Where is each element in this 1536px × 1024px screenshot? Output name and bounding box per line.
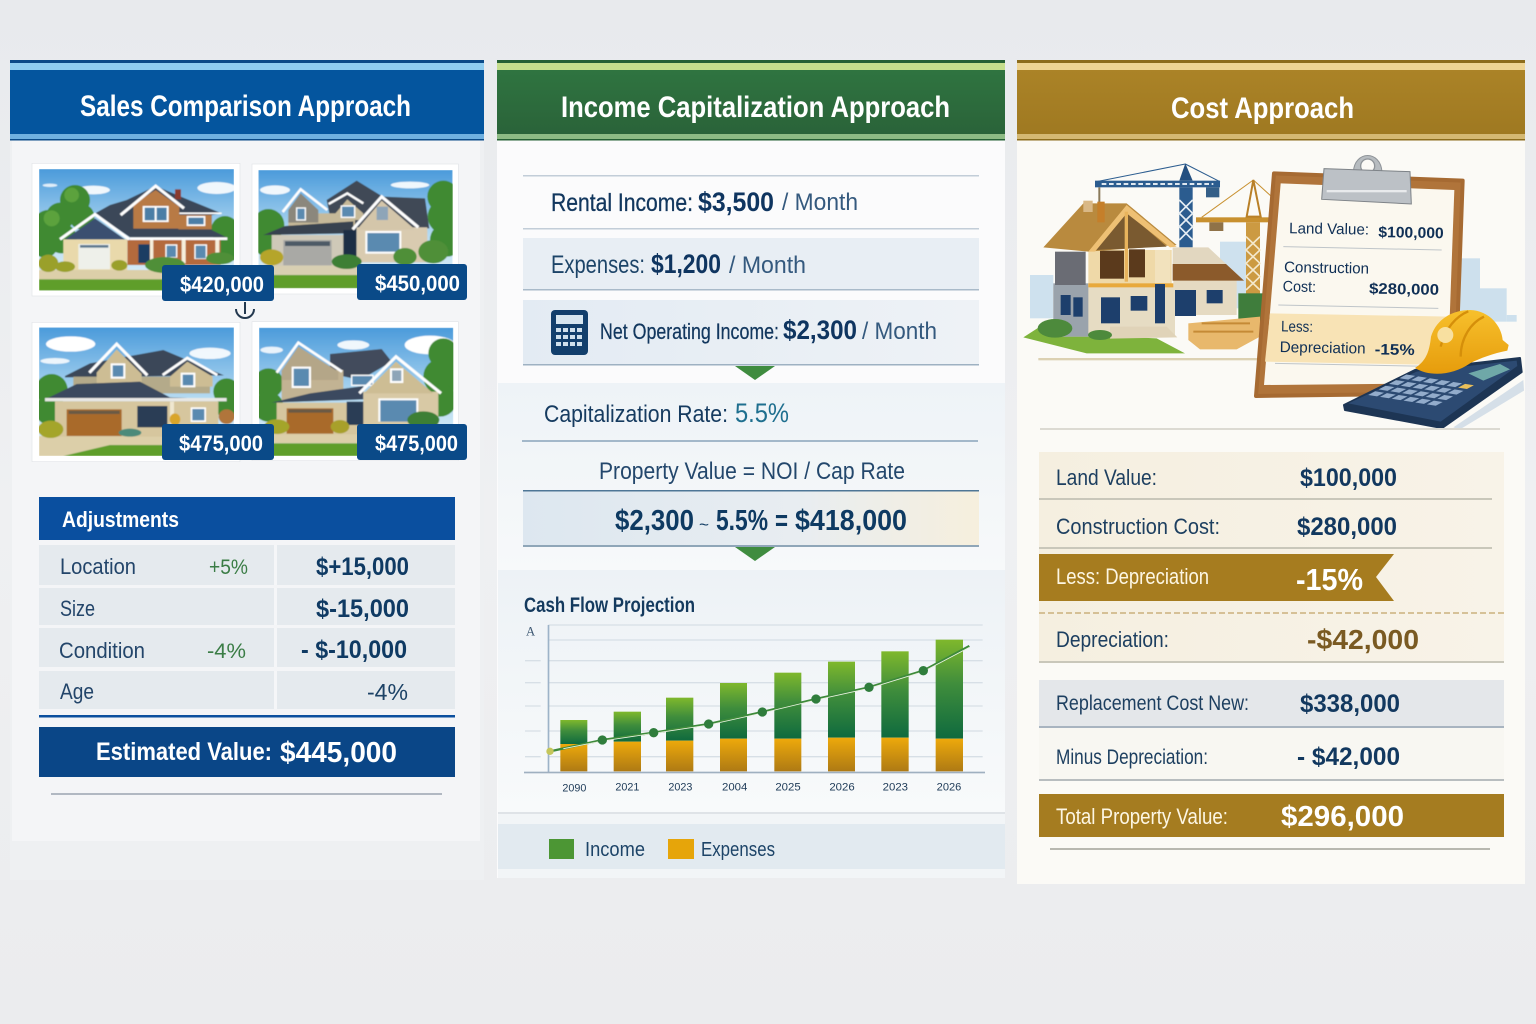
icon: calculator bbox=[551, 310, 588, 355]
row: depreciation: -$42,000 bbox=[1307, 624, 1419, 655]
heading: cost approach: Cost Approach bbox=[1171, 92, 1354, 125]
row: condition: -4% bbox=[207, 640, 246, 663]
row: rental income: Rental Income: bbox=[551, 189, 693, 217]
row: rental income: $3,500 bbox=[698, 187, 774, 217]
row: land value bbox=[1039, 464, 1492, 500]
icon: blue crane bbox=[1095, 163, 1220, 247]
year labels: 2004 bbox=[722, 782, 747, 794]
chart: cash flow projection bars bbox=[524, 624, 985, 794]
total property value bbox=[1039, 794, 1504, 837]
row: minus depreciation: Minus Depreciation: bbox=[1056, 746, 1208, 769]
row: size: $-15,000 bbox=[316, 595, 409, 623]
arrow: down to chart bbox=[735, 547, 775, 561]
estimated value result: $445,000 bbox=[280, 737, 397, 769]
row: land value: $100,000 bbox=[1300, 464, 1397, 492]
row: minus depreciation: - $42,000 bbox=[1297, 743, 1400, 771]
estimated value result bbox=[39, 727, 455, 777]
row: depreciation bbox=[1039, 624, 1504, 663]
row: location: $+15,000 bbox=[316, 553, 409, 581]
adjustments header bbox=[39, 497, 455, 540]
chart title: Cash Flow Projection bbox=[524, 594, 695, 617]
price tag: 420000: $420,000 bbox=[180, 272, 264, 297]
price tag: 475000 left bbox=[162, 424, 274, 460]
chart section band bbox=[498, 570, 1005, 813]
row: expenses: Expenses: bbox=[551, 251, 645, 279]
trend line bbox=[546, 646, 969, 755]
icon: hard hat bbox=[1415, 310, 1509, 374]
clipboard text: Depreciation bbox=[1280, 339, 1366, 358]
year labels: 2021 bbox=[615, 782, 639, 794]
heading: sales comparison approach bbox=[10, 60, 484, 140]
row: location: +5% bbox=[209, 556, 248, 579]
row: net operating income: / Month bbox=[862, 318, 937, 345]
photo: house one bbox=[32, 163, 243, 296]
panel: cost approach bbox=[1017, 60, 1525, 884]
row: land value: Land Value: bbox=[1056, 465, 1157, 490]
arrow: down to cap rate bbox=[735, 366, 775, 380]
icon: calculator bbox=[1344, 358, 1524, 429]
price tag: 450000 bbox=[357, 264, 467, 300]
row: expenses bbox=[523, 238, 979, 290]
row: replacement cost new: $338,000 bbox=[1300, 690, 1400, 718]
estimated value result: Estimated Value: bbox=[96, 738, 272, 766]
heading: income capitalization approach: Income Capitalization Approach bbox=[561, 91, 950, 124]
row: rental income bbox=[523, 175, 979, 230]
clipboard text: Less: bbox=[1281, 318, 1313, 336]
clipboard text: Cost: bbox=[1283, 278, 1316, 296]
capitalization rate: Capitalization Rate: bbox=[544, 401, 728, 428]
ribbon: less depreciation: Less: Depreciation bbox=[1056, 564, 1209, 589]
row: condition bbox=[39, 628, 455, 667]
year labels bbox=[562, 782, 961, 794]
cost table bbox=[1039, 452, 1504, 850]
adjustments header: Adjustments bbox=[62, 507, 179, 532]
icon: yellow crane bbox=[1196, 180, 1272, 323]
row: rental income: / Month bbox=[782, 189, 858, 216]
row: size: Size bbox=[60, 596, 95, 621]
price tag: 420000 bbox=[162, 265, 274, 301]
formula result: = bbox=[775, 505, 788, 537]
photo: house two bbox=[252, 164, 463, 294]
row: size bbox=[39, 588, 455, 625]
heading: sales comparison approach: Sales Comparison Approach bbox=[80, 90, 411, 123]
row: expenses: $1,200 bbox=[651, 249, 721, 279]
row: location bbox=[39, 545, 455, 585]
row: net operating income: Net Operating Income: bbox=[600, 319, 779, 344]
year labels: 2026 bbox=[937, 782, 961, 794]
illustration: construction, clipboard, calculator bbox=[1023, 155, 1524, 429]
row: replacement cost new: Replacement Cost New: bbox=[1056, 692, 1249, 715]
clipboard text: Construction bbox=[1284, 259, 1369, 278]
icon: house under construction bbox=[1023, 201, 1260, 360]
clipboard text: -15% bbox=[1375, 341, 1415, 359]
row: age: Age bbox=[60, 679, 94, 704]
formula: Property Value = NOI / Cap Rate bbox=[599, 458, 905, 485]
legend bbox=[498, 814, 1005, 878]
capitalization section band bbox=[498, 383, 1005, 570]
ribbon: less depreciation: -15% bbox=[1296, 562, 1363, 597]
total property value: Total Property Value: bbox=[1056, 804, 1228, 829]
row: construction cost: Construction Cost: bbox=[1056, 514, 1220, 539]
year labels: 2023 bbox=[668, 782, 692, 794]
ribbon: less depreciation bbox=[1039, 554, 1394, 601]
clipboard text: $100,000 bbox=[1378, 224, 1444, 242]
row: depreciation: Depreciation: bbox=[1056, 627, 1169, 652]
capitalization rate bbox=[522, 398, 978, 442]
skyline bbox=[1030, 242, 1517, 322]
row: replacement cost new bbox=[1039, 680, 1504, 728]
bars: income bbox=[560, 640, 963, 744]
heading: income capitalization approach bbox=[497, 60, 1005, 140]
clipboard clip bbox=[1322, 155, 1411, 204]
photo: house four bbox=[252, 322, 460, 461]
row: net operating income: $2,300 bbox=[783, 315, 857, 345]
legend: Income bbox=[585, 839, 645, 861]
formula result: 5.5% bbox=[716, 505, 768, 537]
legend: Expenses bbox=[701, 839, 775, 861]
price tag: 475000 right: $475,000 bbox=[375, 431, 458, 456]
row: age: -4% bbox=[367, 679, 408, 705]
total property value: $296,000 bbox=[1281, 801, 1404, 833]
formula result: ~ bbox=[699, 517, 709, 534]
row: age bbox=[39, 671, 455, 709]
heading: cost approach bbox=[1017, 60, 1525, 140]
price tag: 475000 left: $475,000 bbox=[179, 431, 263, 456]
adjustments table bbox=[39, 497, 455, 709]
row: net operating income bbox=[523, 300, 979, 366]
price tag: 450000: $450,000 bbox=[375, 271, 460, 296]
row: minus depreciation bbox=[1039, 728, 1504, 781]
icon: clipboard bbox=[1256, 155, 1463, 396]
formula result bbox=[523, 490, 979, 547]
clipboard text: Land Value: bbox=[1289, 220, 1369, 239]
axis label: A bbox=[526, 624, 536, 638]
price tag: 475000 right bbox=[357, 424, 467, 460]
bars: expenses bbox=[560, 738, 963, 771]
row: condition: Condition bbox=[59, 638, 145, 663]
row: location: Location bbox=[60, 554, 136, 579]
row: expenses: / Month bbox=[729, 252, 806, 279]
formula result: $2,300 bbox=[615, 505, 694, 537]
year labels: 2025 bbox=[775, 782, 801, 794]
year labels: 2090 bbox=[562, 782, 586, 794]
formula result: $418,000 bbox=[795, 505, 907, 537]
year labels: 2023 bbox=[883, 782, 908, 794]
panel: income capitalization approach bbox=[497, 60, 1005, 878]
year labels: 2026 bbox=[829, 782, 855, 794]
row: construction cost: $280,000 bbox=[1297, 513, 1397, 541]
comparable house photos bbox=[32, 163, 463, 462]
connector hook icon bbox=[236, 302, 254, 318]
photo: house three bbox=[32, 322, 240, 462]
capitalization rate: 5.5% bbox=[735, 398, 789, 428]
panel: sales comparison approach bbox=[10, 60, 484, 795]
clipboard text bbox=[1280, 220, 1444, 360]
row: construction cost bbox=[1039, 513, 1492, 549]
row: condition: - $-10,000 bbox=[301, 636, 407, 664]
clipboard text: $280,000 bbox=[1369, 281, 1439, 299]
